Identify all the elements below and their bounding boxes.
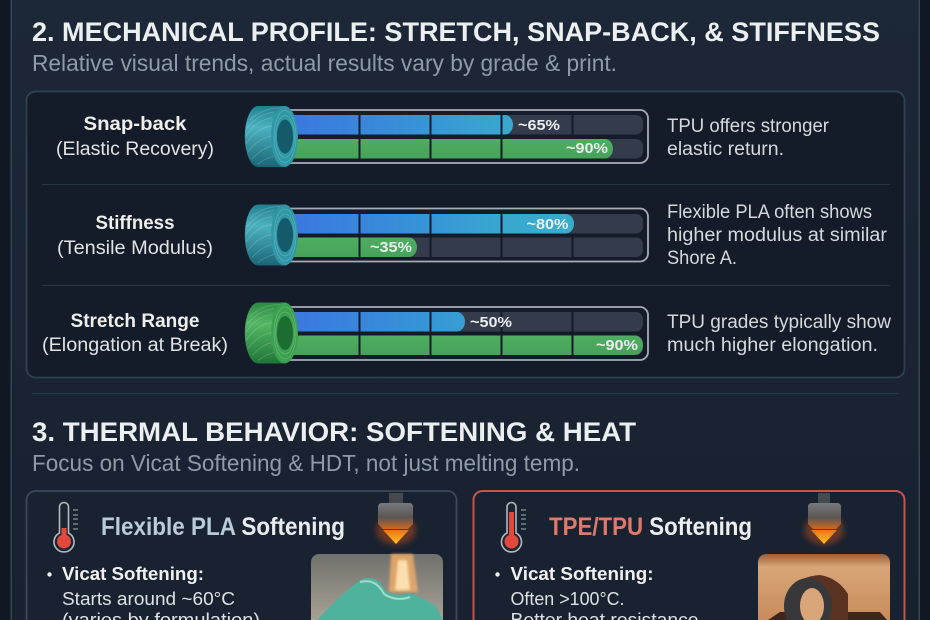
panel: flexible PLA softening: [26, 491, 456, 620]
list: TPE/TPU: Often >100°C.: [510, 589, 624, 609]
icon: teal spool: [245, 106, 298, 167]
bar frame: [280, 110, 648, 163]
icon: teal spool: [245, 204, 298, 266]
icon: hot nozzle: [804, 493, 844, 545]
label: stiffness: (Tensile Modulus): [57, 238, 213, 259]
note: snap-back: [667, 116, 830, 160]
label: stiffness: [57, 213, 213, 259]
list: TPE/TPU: Vicat Softening:: [510, 564, 654, 584]
bars: stretch range: ~50%: [470, 314, 512, 331]
heading: thermal behavior: 3. THERMAL BEHAVIOR: SOFTENING & HEAT: [32, 417, 637, 447]
note: stretch range: much higher elongation.: [667, 335, 878, 356]
bars: snap-back: ~65%: [518, 117, 560, 134]
card title: flexible PLA softening: Flexible PLA Softening: [101, 513, 345, 541]
note: stretch range: TPU grades typically show: [667, 312, 891, 333]
row: snap-back: [56, 106, 830, 167]
bars: snap-back: ~90%: [566, 140, 608, 157]
right margin: [920, 0, 930, 620]
note: snap-back: elastic return.: [667, 139, 784, 160]
row: stretch range: [42, 302, 891, 364]
bars: stiffness: ~80%: [526, 216, 568, 233]
bar frame: [280, 307, 648, 360]
bars: stiffness: ~35%: [370, 239, 412, 256]
panel: mechanical comparison: [26, 92, 904, 378]
icon: thermometer low: [54, 502, 78, 552]
list: flexible PLA: Starts around ~60°C: [62, 589, 235, 609]
image: rigid black TPU part: [758, 554, 890, 620]
image: softened teal part: [311, 554, 443, 620]
bars: stretch range: [290, 312, 643, 355]
list: flexible PLA: Vicat Softening:: [62, 564, 204, 584]
bars: snap-back: [290, 115, 643, 158]
note: stiffness: [667, 202, 888, 269]
list: TPE/TPU: [495, 564, 698, 620]
bars: stiffness: [290, 214, 643, 257]
label: snap-back: Snap-back: [84, 114, 187, 135]
row: stiffness: [57, 202, 888, 269]
list: flexible PLA: [47, 564, 260, 620]
note: stiffness: higher modulus at similar: [667, 225, 888, 246]
icon: green spool: [245, 302, 298, 364]
label: stretch range: (Elongation at Break): [42, 335, 228, 356]
card title: TPE/TPU softening: TPE/TPU Softening: [549, 513, 752, 541]
label: snap-back: (Elastic Recovery): [56, 139, 214, 160]
bar frame: [280, 208, 648, 262]
heading: mechanical profile: 2. MECHANICAL PROFILE: STRETCH, SNAP-BACK, & STIFFNESS: [32, 17, 880, 47]
icon: hot nozzle: [376, 493, 416, 545]
panel: TPE/TPU softening: [474, 491, 904, 620]
label: stretch range: [42, 311, 228, 356]
label: snap-back: [56, 114, 214, 160]
label: stiffness: Stiffness: [96, 213, 174, 234]
note: stiffness: Shore A.: [667, 248, 737, 269]
label: stretch range: Stretch Range: [70, 311, 200, 332]
icon: thermometer high: [502, 502, 526, 552]
subtitle: mechanical profile: Relative visual trends, actual results vary by grade & print.: [32, 50, 617, 76]
bars: stretch range: ~90%: [596, 337, 638, 354]
subtitle: thermal behavior: Focus on Vicat Softening & HDT, not just melting temp.: [32, 450, 580, 476]
left margin: [0, 0, 11, 620]
note: stiffness: Flexible PLA often shows: [667, 202, 872, 223]
note: snap-back: TPU offers stronger: [667, 116, 830, 137]
note: stretch range: [667, 312, 891, 356]
